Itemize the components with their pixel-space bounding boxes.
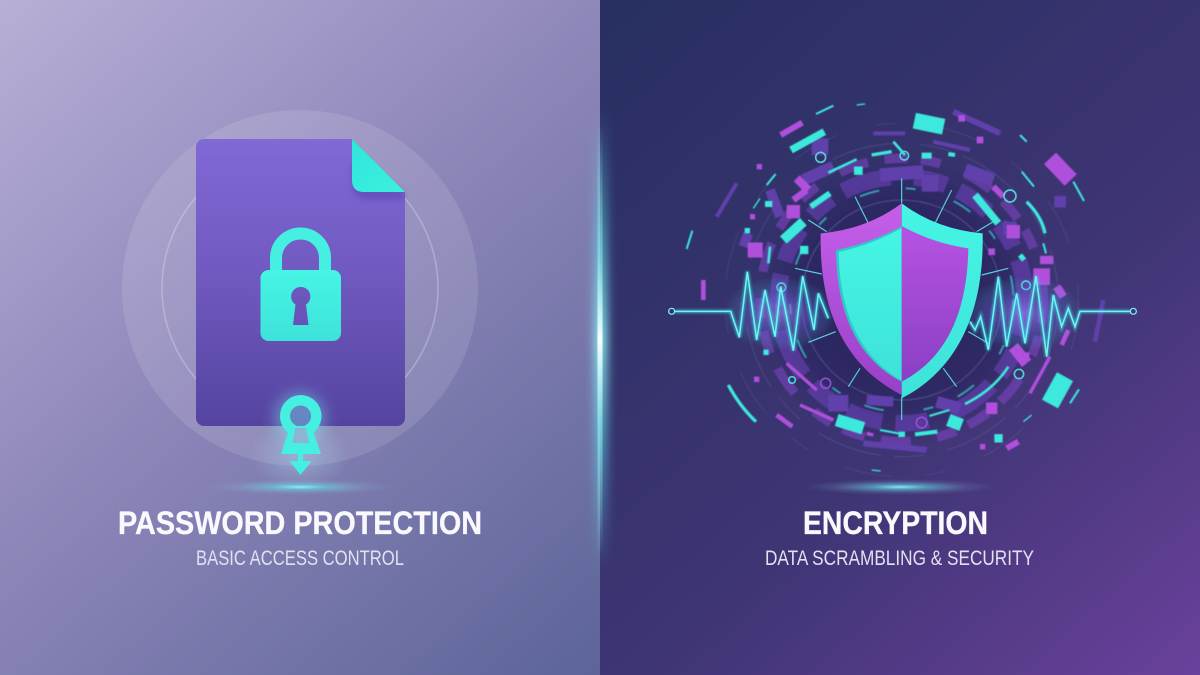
icon: glow behind keyhole [274,392,326,444]
waveform end node left [669,308,675,314]
dim purple data fragments [717,112,1103,450]
folded corner [352,139,405,192]
small node outlines [777,151,1030,428]
halo ring [162,150,438,426]
icon: padlock [260,234,341,341]
folded corner shadow [352,160,404,200]
waveform glow right [963,277,1083,350]
light pool under keyhole [205,479,395,495]
panel: encryption background [600,0,1200,675]
glow below document [250,420,350,490]
shield [821,203,983,398]
shield right inner [902,226,968,382]
waveform glow [723,277,837,350]
halo circle [122,110,478,466]
magenta data fragments [703,118,1071,448]
document page [196,139,405,426]
heading: encryption: ENCRYPTION [803,505,988,541]
radial spokes [795,178,1008,420]
subheading: basic access control: BASIC ACCESS CONTROL [196,547,404,570]
waveform [669,272,1136,357]
waveform end node right [1130,308,1136,314]
shield left inner [836,226,902,382]
panel: password protection background [0,0,600,675]
illustration: encryption shield with data ring [687,104,1103,477]
shield left outer [821,203,902,395]
cyan data fragments [687,104,1084,471]
heading: password protection: PASSWORD PROTECTION [118,505,482,541]
glowing centre divider [595,110,607,570]
subheading: data scrambling and security: DATA SCRAMBLING & SECURITY [765,547,1034,570]
waveform line right [970,276,1130,357]
waveform halo [675,272,1130,357]
waveform line left [675,272,828,351]
segmented rings [725,123,1078,477]
illustration: password-protected document [122,110,478,495]
icon: keyhole with down arrow [280,395,322,475]
light pool under shield [805,479,995,495]
shield right outer [902,203,983,398]
dark core disc [755,153,1048,447]
